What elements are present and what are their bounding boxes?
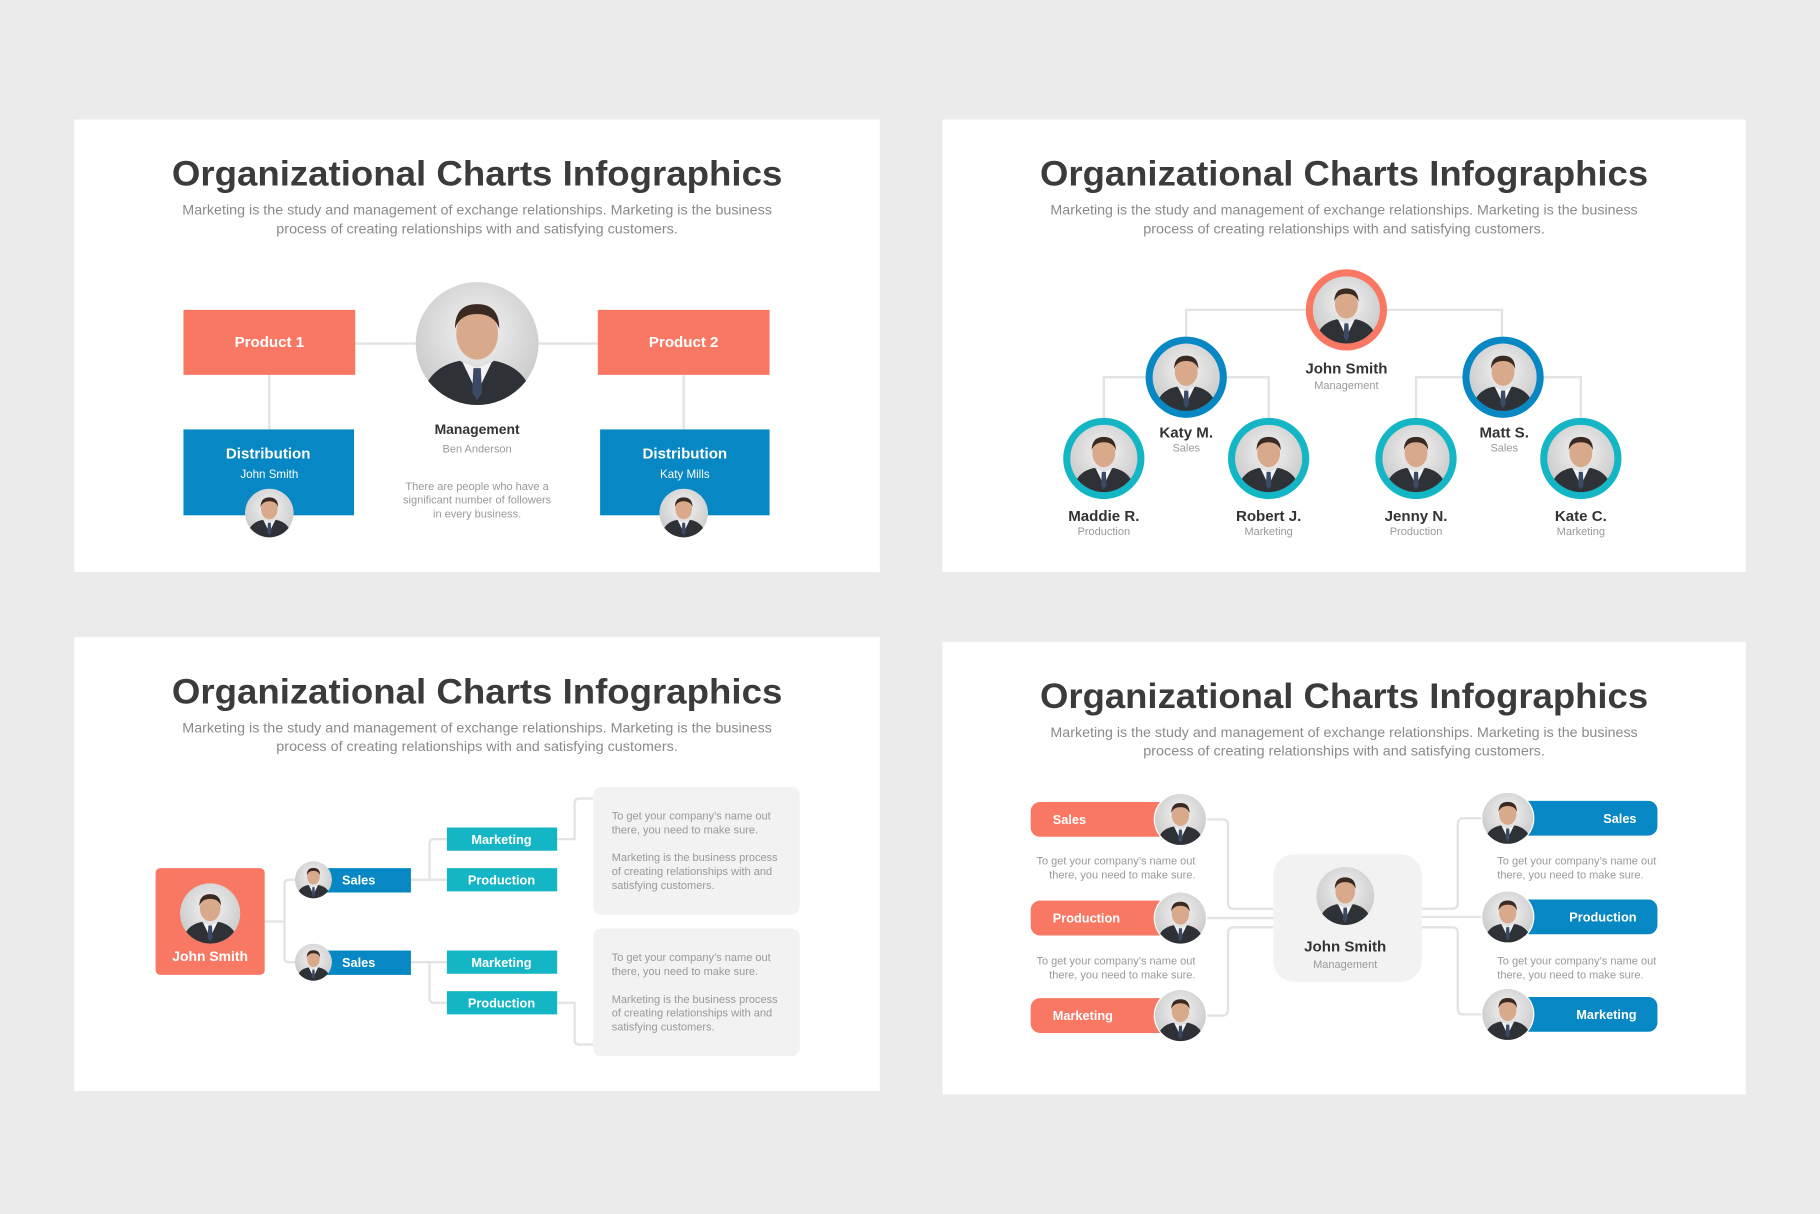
subtitle: process of creating relationships with and satisfying customers. (1143, 220, 1545, 236)
bar: Sales 2 (295, 944, 411, 981)
node: Robert J.: Robert J. (1236, 508, 1301, 525)
panel: hierarchy tree (942, 120, 1746, 572)
node: Jenny N.: Jenny N. (1385, 508, 1447, 525)
node: Kate C.: Marketing (1557, 526, 1605, 538)
node: Matt S.: Matt S. (1480, 425, 1529, 442)
note box 2: satisfying customers. (612, 1022, 715, 1034)
title: Organizational Charts Infographics (172, 672, 782, 711)
subtitle: Marketing is the study and management of exchange relationships. Marketing is the business (1050, 724, 1638, 740)
text: right desc 2 (1497, 955, 1656, 981)
node: Kate C. (1540, 418, 1621, 538)
subtitle: process of creating relationships with and satisfying customers. (276, 220, 678, 236)
box: Distribution John Smith: Distribution (226, 445, 310, 462)
text: right desc 2: there, you need to make sure. (1497, 969, 1644, 981)
note box 2: of creating relationships with and (612, 1008, 772, 1020)
pill: Marketing right (1481, 988, 1657, 1041)
text: left desc 2 (1036, 955, 1196, 981)
subtitle: process of creating relationships with and satisfying customers. (276, 738, 678, 754)
panel: central hub chart (942, 642, 1746, 1094)
node: Katy M. (1146, 337, 1227, 454)
subtitle: process of creating relationships with and satisfying customers. (1143, 743, 1545, 759)
note box 1: Marketing is the business process (612, 852, 778, 864)
note box 2: To get your company’s name out (612, 952, 771, 964)
text: Management: There are people who have a (405, 481, 550, 493)
hub: John Smith: John Smith (1304, 939, 1386, 956)
note box 2 (593, 928, 800, 1056)
bar: Sales 1: Sales (342, 872, 375, 887)
note box 1: satisfying customers. (612, 880, 715, 892)
subtitle: Marketing is the study and management of exchange relationships. Marketing is the business (1050, 202, 1638, 218)
box: Distribution Katy Mills: Katy Mills (660, 468, 710, 481)
pill: Production left: Production (1053, 911, 1120, 926)
pill: Marketing left (1031, 989, 1207, 1042)
title: Organizational Charts Infographics (1040, 155, 1648, 194)
pill: Marketing left: Marketing (1053, 1008, 1113, 1023)
box: Distribution John Smith: John Smith (240, 468, 298, 481)
title: Organizational Charts Infographics (172, 155, 782, 194)
subtitle: Marketing is the study and management of exchange relationships. Marketing is the business (182, 719, 772, 735)
note box 1 (593, 787, 800, 915)
subtitle (1050, 202, 1638, 236)
text: Management: significant number of followers (403, 495, 552, 507)
text: Management: in every business. (433, 509, 521, 521)
hub: John Smith: Management (1313, 959, 1377, 971)
subtitle (182, 202, 772, 236)
panel: horizontal tree (74, 637, 880, 1091)
box: Marketing 2 (447, 951, 557, 974)
text: left desc 1 (1036, 856, 1196, 882)
title: Organizational Charts Infographics (1040, 677, 1648, 716)
pill: Production right (1481, 890, 1657, 944)
box: John Smith (156, 868, 265, 975)
bar: Sales 2: Sales (342, 955, 375, 970)
box: Distribution Katy Mills (600, 429, 770, 538)
box: John Smith: John Smith (172, 948, 248, 964)
bar: Sales 1 (295, 861, 411, 899)
subtitle: Marketing is the study and management of exchange relationships. Marketing is the business (182, 202, 772, 218)
pill: Sales right: Sales (1603, 811, 1637, 826)
text: right desc 1: there, you need to make sure. (1497, 870, 1644, 882)
box: Marketing 1: Marketing (471, 832, 532, 847)
text: left desc 2: To get your company’s name out (1036, 955, 1196, 967)
text: left desc 1: To get your company’s name out (1036, 856, 1196, 868)
note box 1: of creating relationships with and (612, 866, 772, 878)
node: Katy M.: Sales (1172, 442, 1200, 454)
box: Marketing 2: Marketing (471, 955, 532, 970)
box: Distribution Katy Mills: Distribution (643, 445, 727, 462)
node: Katy M.: Katy M. (1159, 425, 1213, 442)
note box 2: Marketing is the business process (612, 994, 778, 1006)
node: Jenny N.: Production (1390, 526, 1442, 538)
node: Matt S. (1462, 337, 1544, 454)
box: Distribution John Smith (183, 429, 354, 538)
text: Management: Management (435, 421, 520, 437)
pill: Sales left (1031, 793, 1207, 846)
box: Product 1: Product 1 (235, 334, 304, 351)
box: Production 1 (447, 868, 557, 891)
text: right desc 2: To get your company’s name out (1497, 955, 1656, 967)
text: left desc 1: there, you need to make sure. (1049, 870, 1196, 882)
node: Jenny N. (1375, 418, 1457, 538)
node: John Smith: John Smith (1305, 361, 1387, 378)
box: Product 2 (598, 310, 770, 375)
hub: John Smith (1273, 854, 1422, 982)
text: left desc 2: there, you need to make sure. (1049, 969, 1196, 981)
box: Production 2: Production (468, 995, 535, 1010)
node: Matt S.: Sales (1490, 442, 1518, 454)
box: Production 2 (447, 991, 557, 1014)
pill: Sales right (1481, 792, 1657, 845)
text: Management: Ben Anderson (442, 444, 512, 456)
node: Maddie R.: Production (1077, 526, 1130, 538)
note box 1: To get your company’s name out (612, 810, 771, 822)
avatar: management (416, 282, 539, 408)
text: right desc 1 (1497, 856, 1656, 882)
node: John Smith: Management (1314, 380, 1379, 392)
text: right desc 1: To get your company’s name out (1497, 856, 1656, 868)
box: Product 1 (183, 310, 355, 375)
box: Marketing 1 (447, 828, 557, 851)
node: Kate C.: Kate C. (1555, 508, 1607, 525)
subtitle (182, 719, 772, 754)
subtitle (1050, 724, 1638, 759)
pill: Marketing right: Marketing (1576, 1007, 1637, 1022)
box: Production 1: Production (468, 872, 535, 887)
pill: Production left (1031, 891, 1207, 945)
node: Robert J.: Marketing (1244, 526, 1293, 538)
pill: Sales left: Sales (1053, 812, 1086, 827)
node: John Smith (1305, 269, 1387, 392)
pill: Production right: Production (1569, 910, 1637, 925)
note box 2: there, you need to make sure. (612, 966, 758, 978)
text: Management (403, 421, 552, 521)
node: Maddie R. (1063, 418, 1144, 538)
panel: product org chart (74, 120, 880, 572)
box: Product 2: Product 2 (649, 334, 718, 351)
node: Robert J. (1228, 418, 1309, 538)
node: Maddie R.: Maddie R. (1068, 508, 1139, 525)
note box 1: there, you need to make sure. (612, 824, 758, 836)
